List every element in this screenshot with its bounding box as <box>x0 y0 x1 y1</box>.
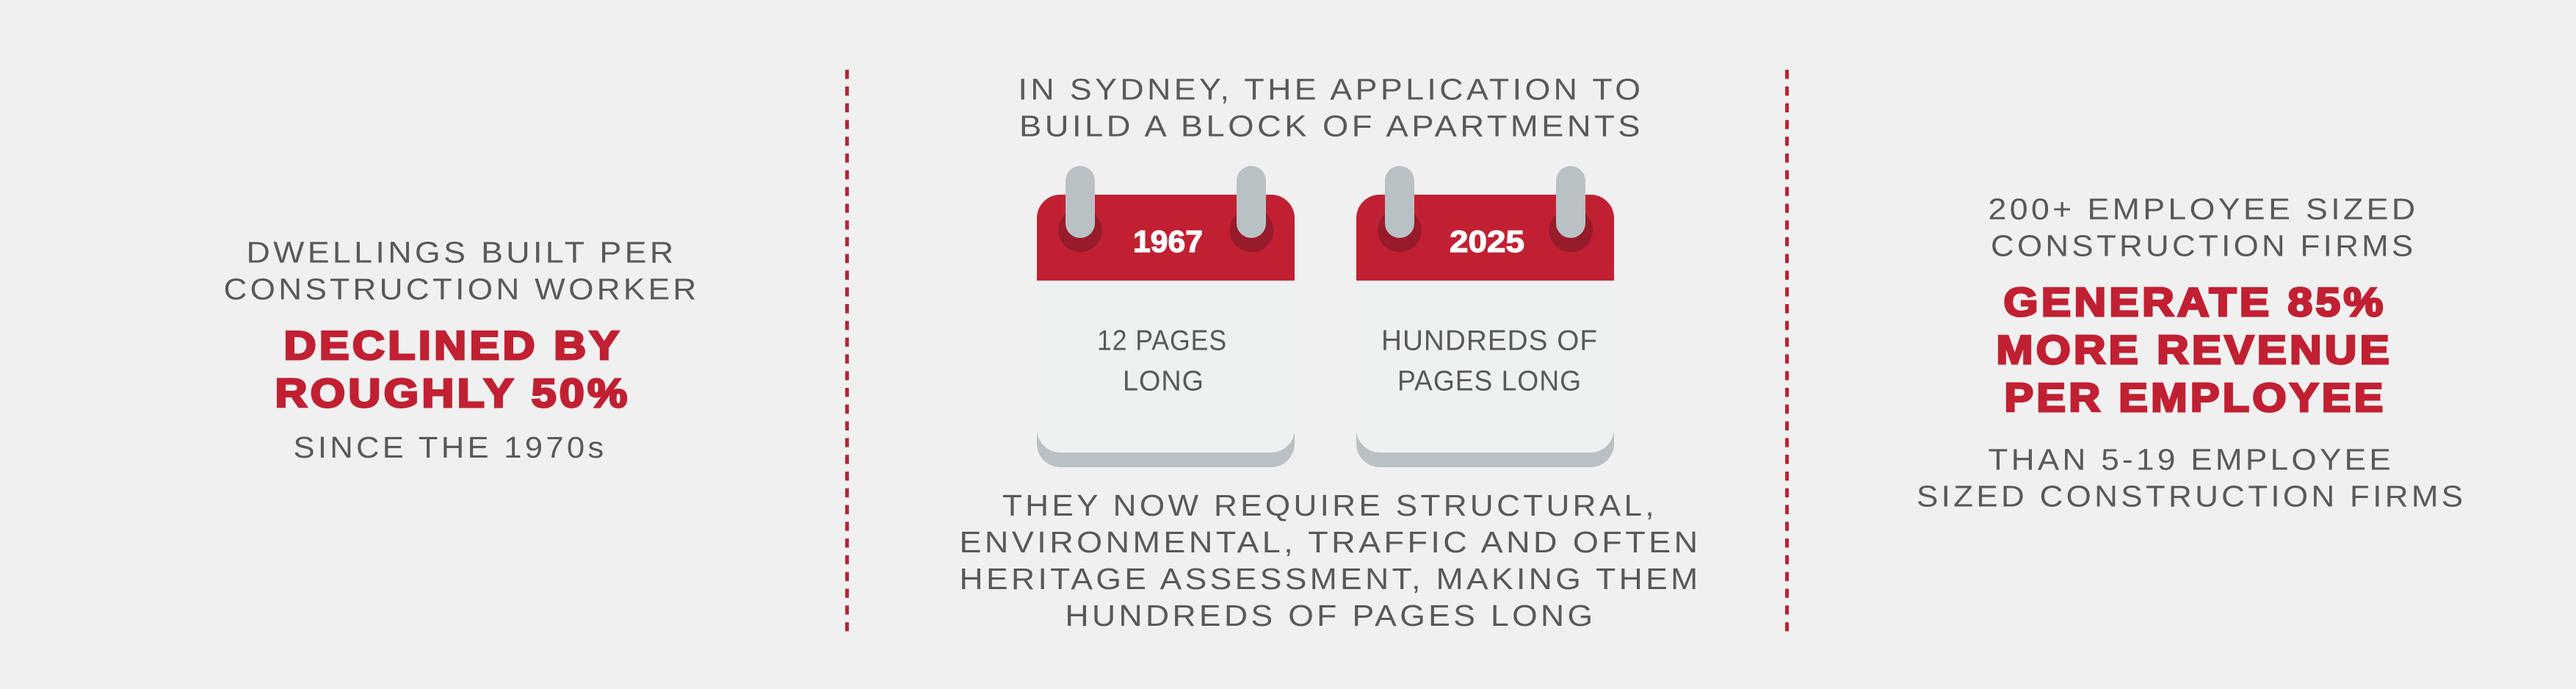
text: required assessments: HUNDREDS OF PAGES LONG <box>1065 599 1596 632</box>
text: small firms comparison: THAN 5-19 EMPLOYEE <box>1989 443 2394 477</box>
label: year 1967: 1967 <box>1133 224 1203 259</box>
text: 12 pages long: 12 PAGES <box>1097 325 1227 357</box>
icon: calendar 2025 <box>1356 166 1614 467</box>
text: 12 pages long <box>1097 325 1227 397</box>
text: required assessments <box>959 488 1701 632</box>
text: small firms comparison <box>1917 443 2466 513</box>
text: hundreds of pages long: HUNDREDS OF <box>1381 325 1598 357</box>
label: year 2025: 2025 <box>1450 224 1524 259</box>
panel: Sydney apartment applications <box>959 73 1701 632</box>
heading: declined by roughly 50% <box>275 322 630 416</box>
text: dwellings intro <box>223 235 699 306</box>
text: dwellings intro: DWELLINGS BUILT PER <box>247 235 677 269</box>
text: 12 pages long: LONG <box>1123 366 1204 397</box>
text: required assessments: THEY NOW REQUIRE STRUCTURAL, <box>1002 488 1657 522</box>
panel: revenue by firm size <box>1917 192 2466 513</box>
heading: generate 85% more revenue per employee <box>1996 279 2392 420</box>
icon: calendar 1967 <box>1037 166 1295 467</box>
text: dwellings intro: CONSTRUCTION WORKER <box>223 273 699 306</box>
text: hundreds of pages long <box>1381 325 1598 397</box>
text: small firms comparison: SIZED CONSTRUCTION FIRMS <box>1917 480 2466 513</box>
text: required assessments: HERITAGE ASSESSMENT, MAKING THEM <box>959 562 1701 596</box>
text: required assessments: ENVIRONMENTAL, TRAFFIC AND OFTEN <box>959 525 1701 559</box>
heading: generate 85% more revenue per employee: PER EMPLOYEE <box>2005 375 2387 420</box>
text: application intro: BUILD A BLOCK OF APARTMENTS <box>1019 109 1643 143</box>
heading: generate 85% more revenue per employee: MORE REVENUE <box>1996 327 2392 372</box>
heading: generate 85% more revenue per employee: GENERATE 85% <box>2003 279 2387 325</box>
text: application intro: IN SYDNEY, THE APPLICATION TO <box>1018 73 1643 107</box>
heading: declined by roughly 50%: DECLINED BY <box>283 322 623 368</box>
text: since the 1970s: SINCE THE 1970s <box>294 430 607 464</box>
text: large firms intro <box>1989 192 2419 263</box>
text: hundreds of pages long: PAGES LONG <box>1397 366 1582 397</box>
text: large firms intro: 200+ EMPLOYEE SIZED <box>1989 192 2419 226</box>
heading: declined by roughly 50%: ROUGHLY 50% <box>275 370 630 416</box>
text: large firms intro: CONSTRUCTION FIRMS <box>1991 229 2416 263</box>
text: application intro <box>1018 73 1643 143</box>
panel: dwellings per construction worker <box>223 235 699 464</box>
